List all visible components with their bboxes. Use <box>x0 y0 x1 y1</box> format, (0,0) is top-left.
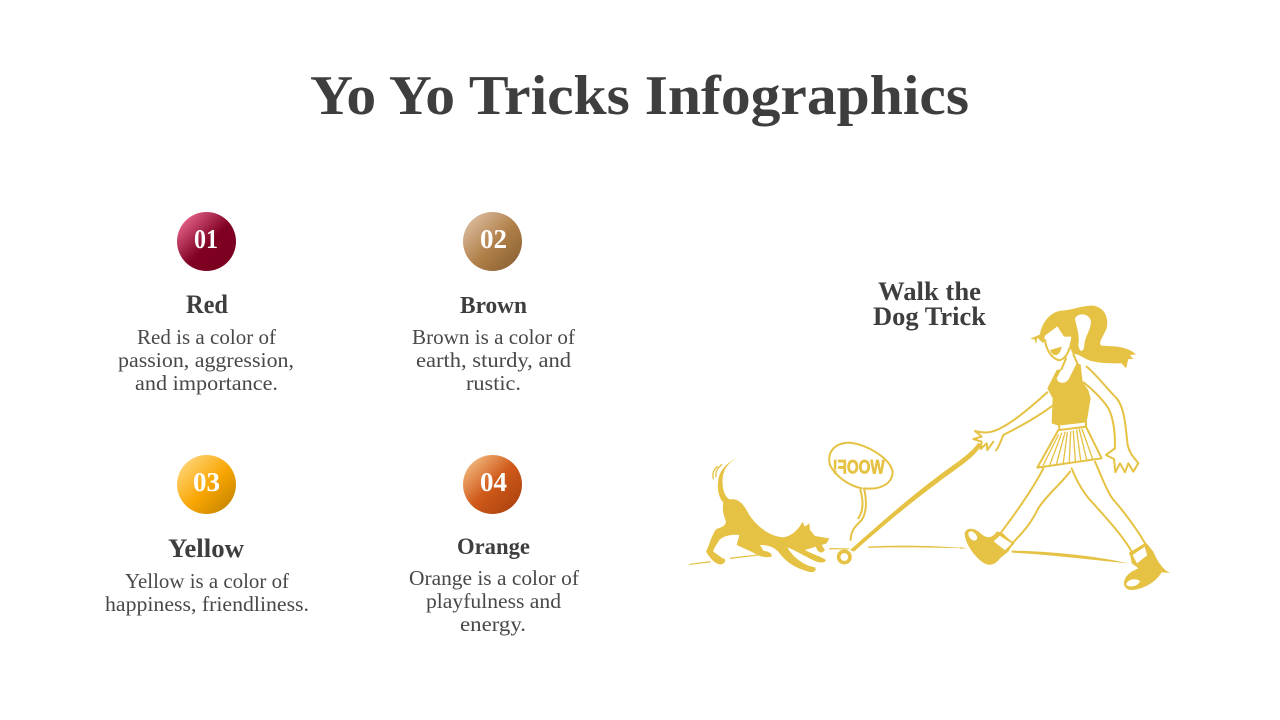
leash ring <box>839 551 850 563</box>
heading: orange: Orange <box>457 534 530 559</box>
description: yellow: happiness, friendliness. <box>105 592 309 616</box>
panel: yellow <box>105 455 309 616</box>
panel: brown <box>412 212 576 395</box>
description: red: and importance. <box>135 371 278 395</box>
right shoe <box>1124 543 1170 590</box>
dog <box>706 458 829 572</box>
badge 03 <box>177 455 236 514</box>
description: orange: Orange is a color of <box>409 566 580 590</box>
badge 02 <box>463 212 522 271</box>
description: red: Red is a color of <box>137 325 277 349</box>
speech bubble <box>829 443 893 540</box>
heading: walk the dog trick <box>873 277 987 331</box>
description: yellow <box>105 569 309 616</box>
description: brown <box>412 325 576 395</box>
left leg <box>1002 468 1070 542</box>
right arm and hand <box>1083 367 1138 472</box>
hair <box>1030 306 1136 368</box>
description: yellow: Yellow is a color of <box>125 569 290 593</box>
badge 04 <box>463 455 522 514</box>
skirt <box>1037 427 1102 468</box>
speech text: WOOF! <box>833 457 885 478</box>
panel: red <box>118 212 294 395</box>
description: red <box>118 325 294 395</box>
description: brown: earth, sturdy, and <box>416 348 571 372</box>
ear <box>1066 337 1071 342</box>
ground <box>689 546 967 565</box>
left shoe <box>965 529 1013 565</box>
face <box>1045 340 1069 360</box>
description: brown: Brown is a color of <box>412 325 576 349</box>
badge 03: 03 <box>193 467 220 497</box>
description: brown: rustic. <box>466 371 521 395</box>
heading: brown: Brown <box>460 293 527 319</box>
badge 01 <box>177 212 236 271</box>
badge 04: 04 <box>480 467 507 497</box>
description: orange: energy. <box>460 612 526 636</box>
panel: orange <box>409 455 580 636</box>
illustration: dog, leash and speech bubble <box>689 443 982 572</box>
heading: walk the dog trick: Dog Trick <box>873 302 987 331</box>
description: orange: playfulness and <box>426 589 561 613</box>
description: red: passion, aggression, <box>118 348 294 372</box>
ground line <box>960 547 1130 564</box>
left arm and hand <box>973 392 1053 450</box>
description: orange <box>409 566 580 636</box>
title: Yo Yo Tricks Infographics <box>310 65 969 127</box>
right leg <box>1072 462 1145 552</box>
ponytail highlight <box>1075 314 1091 351</box>
badge 01: 01 <box>194 224 218 254</box>
neck <box>1062 354 1077 369</box>
heading: yellow: Yellow <box>168 534 244 563</box>
heading: red: Red <box>186 290 229 319</box>
badge 02: 02 <box>480 224 507 254</box>
belt <box>1059 423 1086 430</box>
leash <box>850 443 982 552</box>
tank top <box>1047 363 1091 426</box>
tail motion marks <box>713 465 722 479</box>
heading: walk the dog trick: Walk the <box>878 277 981 306</box>
illustration: girl walking <box>960 306 1170 590</box>
